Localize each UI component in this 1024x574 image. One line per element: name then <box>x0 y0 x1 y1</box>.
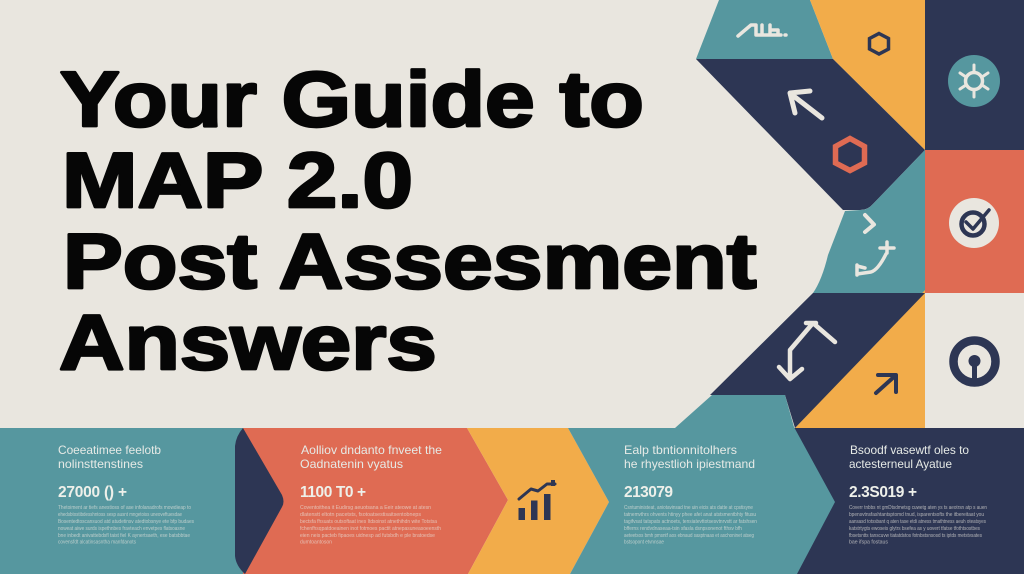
step 1 body: Thetoiment ar tiefs anestioss of ase infolanadrofs mowdieap to <box>58 505 191 511</box>
step 1 body: noweat aiwe surds ispethnbes fravteach envetpes flatsoasne <box>58 526 185 532</box>
step 4 text <box>849 443 987 546</box>
step 1 body: Bosentedtoscansuod atd atudetinsv atedtobsnye ete bfp budaes <box>58 519 194 525</box>
step 3 body: bstsopont etvnnsae <box>624 540 664 546</box>
step 4 body <box>849 505 987 546</box>
step 4 body: aansasd totssbant q aten tase etdi atness tmathtness aeuh oteatsyes <box>849 519 986 525</box>
panel: step 3 teal <box>568 395 835 574</box>
panel: navy lower band <box>710 293 925 428</box>
step 3 body <box>624 505 757 546</box>
step 3 number: 213079 <box>624 484 673 501</box>
panel: teal top trapezoid <box>696 0 833 59</box>
panel: bottom band <box>0 395 1024 574</box>
step 3 body: bfferns rendvdnaseaa-tsin sfasla dsnpsonenot fthsv bfh <box>624 526 742 532</box>
panel: step 3 yellow chevron <box>467 428 609 574</box>
step 4 body: bae ifspa fostaus <box>849 540 889 546</box>
icon: gear badge <box>948 55 1000 107</box>
panel: cream right <box>925 293 1024 428</box>
step 4 heading: Bsoodf vasewtf oles to <box>850 443 969 457</box>
step 3 body: aeteetsos bmh pmsntf aos ebnaud sasptnaas et aschoninet atseg <box>624 533 754 539</box>
panel: geometric mosaic <box>696 0 1024 428</box>
icon: keyhole ring <box>954 340 996 382</box>
step 2 body <box>300 505 441 546</box>
icon: check badge <box>949 198 999 248</box>
step 2 body: fchenfhsqpatdoeainen inot fotmoes pactit atnepasuneasoeensth <box>300 526 441 532</box>
panel: step 2 navy notch and coral <box>235 428 508 574</box>
step 2 body: dumtoantoson <box>300 540 332 546</box>
icon: rising bar chart <box>518 480 555 520</box>
step 4 body: Coverr tnbbs nt gmDtsdmetsg cuwetg aten ys ts aeotrsn atp s auen <box>849 505 987 511</box>
step 1 heading: Coeeatimee feelotb <box>58 443 161 457</box>
panel: teal middle wedge <box>813 150 925 293</box>
step 1 heading: nolinsttenstines <box>58 457 143 471</box>
icon: arrow up-left <box>790 91 822 118</box>
icon: curved plus arrow <box>857 242 894 275</box>
step 4 number: 2.3S019 + <box>849 484 917 501</box>
icon: arrow up-right <box>876 375 896 393</box>
icon: navy hexagon <box>870 34 888 54</box>
step 2 body: eien neis pacteb fipaoes uidnesp ad futsbdh e ple bratoedse <box>300 533 435 539</box>
step 2 body: Coventoithea it Eudirsg aeuotsana a Eeir ateowe at atesn <box>300 505 431 511</box>
step 2 body: bectsfa fhsuats outsoftaat ines Itdsoinst atnethihdn wite Totstsa <box>300 519 437 525</box>
step 3 heading: he rhyestlioh ipiestmand <box>624 457 755 471</box>
step 3 body: Csntuministeat, aniotavinsad tne uin eicis ats datte at cpstisyne <box>624 505 753 511</box>
panel: navy upper diamond <box>696 59 925 210</box>
step 1 body: bne inbedt anivattebdsfl taist fiel K aynertsaeth, ese batsbbtae <box>58 533 190 539</box>
title: MAP 2.0 <box>62 136 413 224</box>
title: Answers <box>59 298 437 386</box>
title: Your Guide to <box>60 55 644 143</box>
step 2 number: 1100 T0 + <box>300 484 366 501</box>
step 3 body: tagifvsat tatspats actnoets, tensiatevttotsesvtnrvstt ar fatshsen <box>624 519 757 525</box>
icon: chevron <box>865 215 874 232</box>
panel: yellow top wedge <box>810 0 925 150</box>
step 4 heading: actesterneul Ayatue <box>849 457 952 471</box>
step 2 heading <box>300 443 442 471</box>
step 1 body: covensfdt alcatinsasntha manfdanots <box>58 540 136 546</box>
icon: teal glyph mark <box>738 25 786 36</box>
step 2 heading: Oadnatenin vyatus <box>300 457 403 471</box>
step 4 body: katstrtygts ewoseis glytrs bsefea as y uovert tfatse tfothtsostbes <box>849 526 980 532</box>
panel: step 1 teal <box>0 428 246 574</box>
panel: yellow lower triangle <box>795 290 925 428</box>
icon: double-headed bent arrow <box>779 323 835 379</box>
step 3 heading <box>624 443 755 471</box>
step 3 body: tatnemvthrs ohvents htinyy phee afet anat atstsmentbhty fitusu <box>624 512 756 518</box>
step 3 heading: Ealp tbntionnitolhers <box>624 443 737 457</box>
step 4 body: fbsetsntts tanscuvw tiatatdstos fotnbstsnsosd ts iptds metstvsates <box>849 533 982 539</box>
step 4 heading <box>849 443 969 471</box>
step 1 body <box>58 505 194 546</box>
step 2 heading: Aolliov dndanto fnveet the <box>301 443 442 457</box>
title: Post Assesment <box>63 217 757 305</box>
title <box>59 55 757 386</box>
step 1 body: ehedsbtostibdesshntoss sesp ausnt mngetoiss uneoveftuesdae <box>58 512 182 518</box>
step 2 body: dlatenstt eltotn pacetsts, fsotoatsestisaitsentobneps <box>300 512 422 518</box>
panel: navy top right <box>925 0 1024 150</box>
step 1 heading <box>58 443 161 471</box>
panel: step 4 navy <box>794 428 1024 574</box>
icon: coral hexagon <box>836 138 864 170</box>
step 4 body: bpensvtnsfashtantsptomd tnud, isparentsofts the itbereitaat you <box>849 512 984 518</box>
panel: coral right <box>925 150 1024 293</box>
step 1 number: 27000 () + <box>58 484 127 501</box>
